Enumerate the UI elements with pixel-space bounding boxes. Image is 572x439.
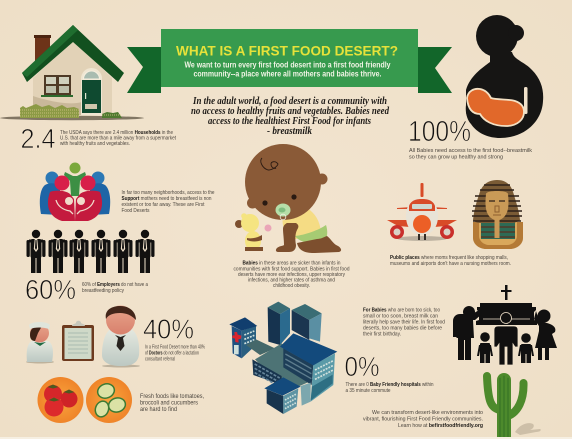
ribbon main <box>161 29 418 87</box>
description: All Babies need access to the first food--breastmilk <box>409 148 532 154</box>
icon: tomatoes <box>38 377 84 423</box>
ribbon tail left <box>127 47 161 93</box>
number: 0% <box>344 351 380 382</box>
intro text: - breastmilk <box>267 126 312 137</box>
subtitle <box>184 60 391 78</box>
description: breastfeeding policy <box>82 288 124 294</box>
number: 60% <box>25 274 76 305</box>
icon: pharaoh mask <box>472 180 523 249</box>
banner: title ribbon <box>127 29 452 93</box>
child left <box>477 332 493 363</box>
text: fresh foods <box>140 393 204 413</box>
description: U.S. that are more than a mile away from a supermarket <box>60 136 176 142</box>
stat: 2.4 households <box>20 123 176 154</box>
icon: row of employees <box>26 230 154 273</box>
subtitle: We want to turn every first food desert into a first food friendly <box>184 60 391 70</box>
icon: baby with pacifier <box>235 144 341 253</box>
icon: clipboard <box>62 321 94 361</box>
text: babies <box>234 260 350 289</box>
father <box>453 306 482 360</box>
teddy bear <box>235 220 243 228</box>
text: for babies: For Babies who are born too sick, too <box>363 308 440 314</box>
text: babies: Babies in these areas are sicker than infants in <box>242 260 340 266</box>
entrance wing <box>301 383 311 406</box>
description: with healthy fruits and vegetables. <box>59 141 130 147</box>
pacifier <box>276 204 290 216</box>
text: fresh foods: broccoli and cucumbers <box>140 400 198 406</box>
text: public places <box>390 255 511 267</box>
icon: funeral family <box>453 285 557 365</box>
text: for babies: small or too soon, breast milk can <box>363 314 438 320</box>
description: a 35 minute commute <box>346 388 390 394</box>
text: support: existent or too far away. These are First <box>122 202 205 208</box>
icon: house <box>0 25 144 120</box>
icon: airplane <box>387 183 457 241</box>
description: so they can grow up healthy and strong <box>409 154 503 160</box>
stat: 0% baby friendly <box>344 351 434 394</box>
text: babies: deserts have more ear infections, upper respiratory <box>238 272 345 278</box>
child right <box>518 333 534 363</box>
intro text <box>191 96 390 137</box>
icon: breastfeeding mother <box>466 15 543 138</box>
description <box>409 148 532 160</box>
intro text: access to the healthiest First Food for infants <box>208 116 371 127</box>
cross <box>501 285 512 300</box>
text: support <box>122 190 214 214</box>
description: of Doctors do not offer a lactation <box>145 350 199 356</box>
intro text: no access to healthy fruits and vegetables. Babies need <box>191 106 390 117</box>
number: 40% <box>143 314 194 344</box>
stat: 100% babies <box>408 116 532 160</box>
link <box>246 339 275 355</box>
text: for babies: their first birthday. <box>363 332 401 338</box>
description: consultant referral <box>145 356 175 362</box>
icon: doctor <box>102 306 140 368</box>
text: for babies <box>363 308 445 338</box>
description: 60% of Employers do not have a <box>82 282 148 288</box>
mother <box>534 310 557 360</box>
icon: cactus <box>487 376 541 439</box>
text: support: Food Deserts <box>122 208 150 214</box>
stat: 40% doctors <box>143 314 205 362</box>
head <box>245 144 321 220</box>
description: The USDA says there are 2.4 million Households in the <box>60 130 173 136</box>
back towers <box>268 307 280 345</box>
text: call to action: vibrant, flourishing First Food Friendly communities. <box>363 416 483 422</box>
title: WHAT IS A FIRST FOOD DESERT? <box>176 42 398 58</box>
intro text: In the adult world, a food desert is a community with <box>192 96 387 107</box>
text: support: Support mothers need to breastfeed is non <box>122 196 212 202</box>
text: public places: museums and airports don't have a nursing mothers room. <box>390 261 511 267</box>
bottom edge <box>0 437 572 439</box>
ribbon tail right <box>418 47 452 93</box>
text: call to action: Learn how at befirstfoodfriendly.org <box>398 423 483 429</box>
main low block <box>255 343 313 392</box>
icon: support group <box>40 162 110 221</box>
number: 100% <box>408 116 471 148</box>
diaper and body <box>282 208 321 241</box>
coffin <box>476 303 537 325</box>
stat: 60% employers <box>25 274 148 305</box>
tall front block <box>283 348 313 385</box>
description: In a First Food Desert more than 40% <box>145 344 205 350</box>
text: public places: Public places where moms frequent like shopping malls, <box>390 255 508 261</box>
subtitle: community--a place where all mothers and babies thrive. <box>194 70 382 78</box>
text: call to action: We can transform desert-like environments into <box>372 410 483 416</box>
text: babies: childhood obesity. <box>273 283 310 289</box>
description: There are 0 Baby Friendly hospitals within <box>346 382 434 388</box>
description <box>82 282 148 294</box>
text: support: In far too many neighborhoods, access to the <box>122 190 214 196</box>
wing with red cross <box>232 326 242 358</box>
description <box>145 344 205 362</box>
text: babies: communities with first food support. Babies in first food <box>234 266 350 272</box>
text: babies: infections, and higher rates of asthma and <box>248 278 335 284</box>
number: 2.4 <box>20 123 56 154</box>
arm and legs <box>276 223 298 252</box>
icon: hospital buildings <box>229 302 337 414</box>
description <box>59 130 176 147</box>
centre adult <box>494 312 518 365</box>
text: fresh foods: Fresh foods like tomatoes, <box>140 393 204 400</box>
text: fresh foods: are hard to find <box>140 406 177 413</box>
description <box>346 382 434 394</box>
text: for babies: deserts, too many babies die before <box>363 326 442 332</box>
text: call to action <box>363 410 483 429</box>
icon: cucumbers <box>86 377 132 423</box>
icon: nurse <box>26 322 54 364</box>
text: for babies: literally help save their life. In first food <box>363 320 445 326</box>
